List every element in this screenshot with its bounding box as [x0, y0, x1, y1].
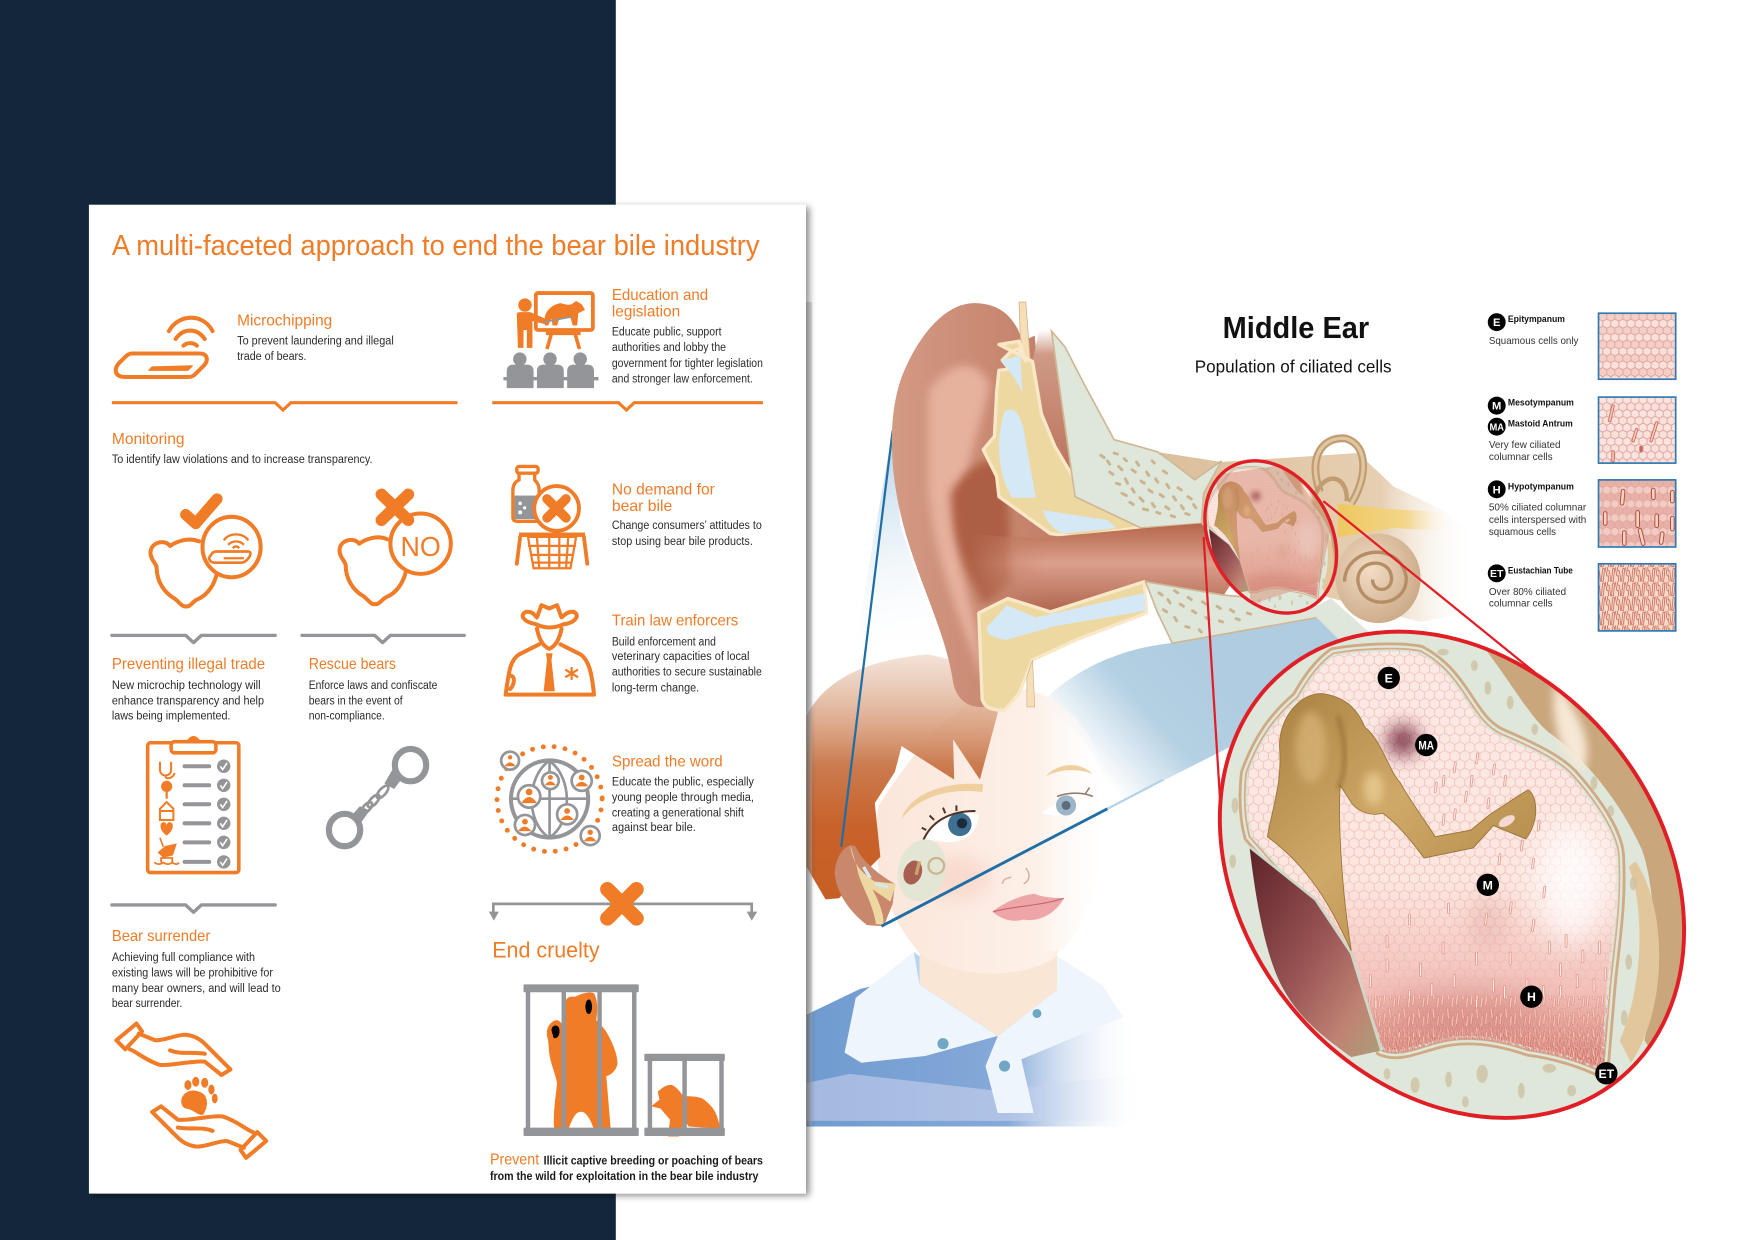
legend: epitympanum	[1488, 313, 1676, 379]
section: bear surrender: Achieving full compliance with	[112, 951, 255, 964]
body text: To prevent laundering and illegal	[237, 335, 394, 348]
body text: and stronger law enforcement.	[612, 373, 753, 386]
body text: Build enforcement and	[612, 635, 716, 648]
mini ear section	[834, 834, 953, 926]
small cage	[644, 1054, 725, 1136]
marker M: M	[1483, 878, 1493, 892]
legend: hypotympanum: squamous cells	[1489, 527, 1556, 538]
body text: stop using bear bile products.	[612, 535, 753, 548]
heading: end cruelty: End cruelty	[492, 938, 600, 963]
section: monitoring	[112, 431, 373, 466]
upper hand	[116, 1024, 230, 1075]
body text: authorities to secure sustainable	[612, 666, 762, 679]
heading: Middle Ear: Middle Ear	[1223, 312, 1369, 345]
heading: No demand for	[612, 481, 715, 498]
eyebrows	[902, 765, 1093, 819]
icon: globe and people	[497, 746, 602, 852]
section: bear surrender: Bear surrender	[112, 928, 210, 945]
section: bear surrender: many bear owners, and will lead to	[112, 982, 281, 995]
branching arrow with cross	[489, 889, 757, 921]
legend: epitympanum: Epitympanum	[1508, 314, 1565, 324]
body text: creating a generational shift	[612, 807, 745, 820]
collar buttons	[937, 1009, 1041, 1072]
large cage	[524, 984, 639, 1136]
marker MA	[1415, 734, 1437, 756]
cochlea	[1336, 534, 1421, 623]
divider: grey left	[112, 635, 275, 643]
section: no demand for bear bile	[513, 466, 762, 568]
collar	[845, 952, 1123, 1113]
icon: bear with microchip	[150, 499, 261, 606]
lower temporal bone	[1145, 582, 1318, 643]
legend: mesotympanum and mastoid antrum: Mastoid Antrum	[1508, 419, 1573, 429]
icon: handcuffs	[329, 749, 426, 846]
section: preventing illegal trade: enhance transparency and help	[112, 695, 264, 708]
hair	[807, 654, 999, 899]
magnified middle ear	[1218, 630, 1686, 1120]
face	[876, 689, 1105, 974]
blue zoom lines	[841, 431, 1163, 926]
marker H: H	[1527, 990, 1536, 1004]
pinna	[892, 303, 1219, 707]
legend: hypotympanum: H	[1493, 484, 1501, 496]
cartilage stem top	[1019, 302, 1030, 360]
marker E: E	[1385, 671, 1393, 685]
marker MA: MA	[1418, 738, 1434, 752]
left eye	[922, 805, 979, 842]
icon: classroom	[503, 293, 598, 388]
marker ET	[1595, 1062, 1618, 1085]
legend: hypotympanum: Hypotympanum	[1508, 481, 1574, 491]
lower hand	[152, 1106, 266, 1158]
heading: Microchipping	[237, 313, 332, 330]
legend: eustachian tube: Eustachian Tube	[1508, 565, 1573, 575]
marker ET: ET	[1599, 1067, 1615, 1081]
legend	[1488, 313, 1676, 631]
legend: mesotympanum and mastoid antrum: columnar cells	[1489, 452, 1553, 463]
section: rescue bears: Rescue bears	[309, 656, 396, 673]
heading: Spread the word	[612, 753, 723, 770]
small red ellipse	[1179, 437, 1363, 637]
semicircular canals	[1315, 438, 1363, 503]
section: preventing illegal trade: Preventing illegal trade	[112, 656, 265, 673]
section: rescue bears: non-compliance.	[309, 709, 385, 722]
auditory nerve	[1338, 503, 1452, 537]
heading: bear bile	[612, 498, 673, 515]
icon: bottle and basket	[513, 466, 587, 568]
legend: mesotympanum and mastoid antrum: MA	[1489, 423, 1504, 434]
marker H	[1520, 986, 1543, 1008]
body text: young people through media,	[612, 791, 754, 804]
paw	[181, 1077, 218, 1115]
body text: veterinary capacities of local	[612, 650, 749, 663]
heading: Train law enforcers	[612, 612, 738, 629]
section: rescue bears	[309, 656, 437, 722]
boy illustration	[807, 431, 1163, 1126]
heading	[612, 481, 715, 515]
section: bear surrender: existing laws will be prohibitive for	[112, 967, 273, 980]
body text: against bear bile.	[612, 821, 696, 834]
eustachian tube	[1309, 598, 1381, 654]
prevent statement	[490, 1151, 763, 1183]
prevent statement: Prevent	[490, 1151, 540, 1168]
body text	[612, 519, 762, 548]
red zoom lines	[1204, 501, 1588, 805]
marker M	[1477, 874, 1499, 896]
inner ear background	[1157, 452, 1477, 622]
body text: long-term change.	[612, 681, 699, 694]
legend: eustachian tube	[1488, 564, 1676, 631]
pink strip above canal	[1032, 330, 1075, 493]
section: spread the word	[497, 746, 754, 852]
small highlighted middle ear	[1206, 462, 1335, 608]
shirt	[807, 973, 1141, 1126]
cheek blush	[921, 856, 992, 900]
body text	[612, 326, 763, 386]
lower cartilage	[979, 582, 1147, 710]
heading: Education and	[612, 287, 708, 304]
legend: epitympanum: Squamous cells only	[1489, 336, 1579, 347]
body text: authorities and lobby the	[612, 341, 726, 354]
body text	[237, 335, 394, 363]
nose	[1002, 868, 1029, 884]
section: bear surrender	[112, 928, 281, 1010]
divider: orange left	[112, 403, 458, 410]
ear canal	[962, 524, 1236, 612]
icon: clipboard checklist	[148, 736, 239, 873]
legend: hypotympanum	[1488, 480, 1676, 547]
section: preventing illegal trade: New microchip technology will	[112, 679, 261, 692]
divider: grey right	[302, 635, 464, 643]
cub	[651, 1085, 721, 1137]
body text: Change consumers’ attitudes to	[612, 519, 762, 532]
heading: legislation	[612, 304, 680, 321]
middle ear illustration	[807, 302, 1754, 1211]
lips	[992, 894, 1064, 921]
legend: hypotympanum: 50% ciliated columnar	[1489, 503, 1587, 514]
icon: bear with NO sign: NO	[400, 531, 441, 562]
icon: microchip	[116, 318, 213, 377]
dark navy side panel	[0, 0, 616, 1240]
magnification cone	[852, 431, 1409, 807]
icon: bear with NO sign	[340, 494, 451, 604]
adult bear	[547, 992, 617, 1130]
neck	[920, 951, 1057, 1036]
divider: orange right	[492, 403, 763, 410]
upper temporal bone	[1052, 331, 1222, 528]
body text: trade of bears.	[237, 350, 307, 363]
title: A multi-faceted approach to end the bear bile industry	[112, 230, 760, 262]
upper cartilage	[983, 341, 1200, 537]
body text: Educate the public, especially	[612, 775, 754, 788]
legend: mesotympanum and mastoid antrum: M	[1492, 400, 1501, 412]
section: train law enforcers	[506, 605, 762, 695]
legend: eustachian tube: ET	[1490, 569, 1504, 580]
body text	[612, 775, 754, 834]
section: rescue bears: Enforce laws and confiscate	[309, 679, 437, 692]
body text	[612, 635, 762, 694]
section: monitoring: To identify law violations and to increase transparency.	[112, 453, 373, 466]
marker E	[1378, 667, 1400, 689]
big red ellipse	[1124, 539, 1754, 1211]
legend: eustachian tube: columnar cells	[1489, 599, 1553, 610]
section: preventing illegal trade	[112, 656, 265, 722]
section: preventing illegal trade: laws being implemented.	[112, 709, 230, 722]
legend: eustachian tube: Over 80% ciliated	[1489, 587, 1566, 598]
legend: mesotympanum and mastoid antrum: Very few ciliated	[1489, 440, 1561, 451]
right eye	[1041, 788, 1093, 816]
divider: grey lower	[112, 905, 275, 912]
section: bear surrender: bear surrender.	[112, 997, 182, 1010]
section: education and legislation	[503, 287, 763, 388]
section: rescue bears: bears in the event of	[309, 695, 403, 708]
legend: epitympanum: E	[1493, 317, 1501, 329]
icon: officer	[506, 605, 594, 695]
prevent statement: Illicit captive breeding or poaching of bears	[544, 1154, 763, 1167]
legend: mesotympanum and mastoid antrum	[1488, 397, 1676, 463]
inner collar shadow	[906, 952, 920, 990]
white infographic panel	[89, 205, 812, 1194]
subheading: Population of ciliated cells	[1195, 357, 1392, 377]
section: microchipping	[116, 313, 394, 377]
pinna shading	[928, 366, 1012, 682]
prevent statement: from the wild for exploitation in the bear bile industry	[490, 1170, 759, 1183]
body text: government for tighter legislation	[612, 357, 763, 370]
legend: mesotympanum and mastoid antrum: Mesotympanum	[1508, 398, 1574, 408]
legend: hypotympanum: cells interspersed with	[1489, 515, 1586, 526]
section: monitoring: Monitoring	[112, 431, 185, 448]
illustration: caged bears	[524, 984, 725, 1137]
body text: Educate public, support	[612, 326, 722, 339]
icon: hands and paw	[116, 1024, 266, 1158]
heading	[612, 287, 708, 321]
